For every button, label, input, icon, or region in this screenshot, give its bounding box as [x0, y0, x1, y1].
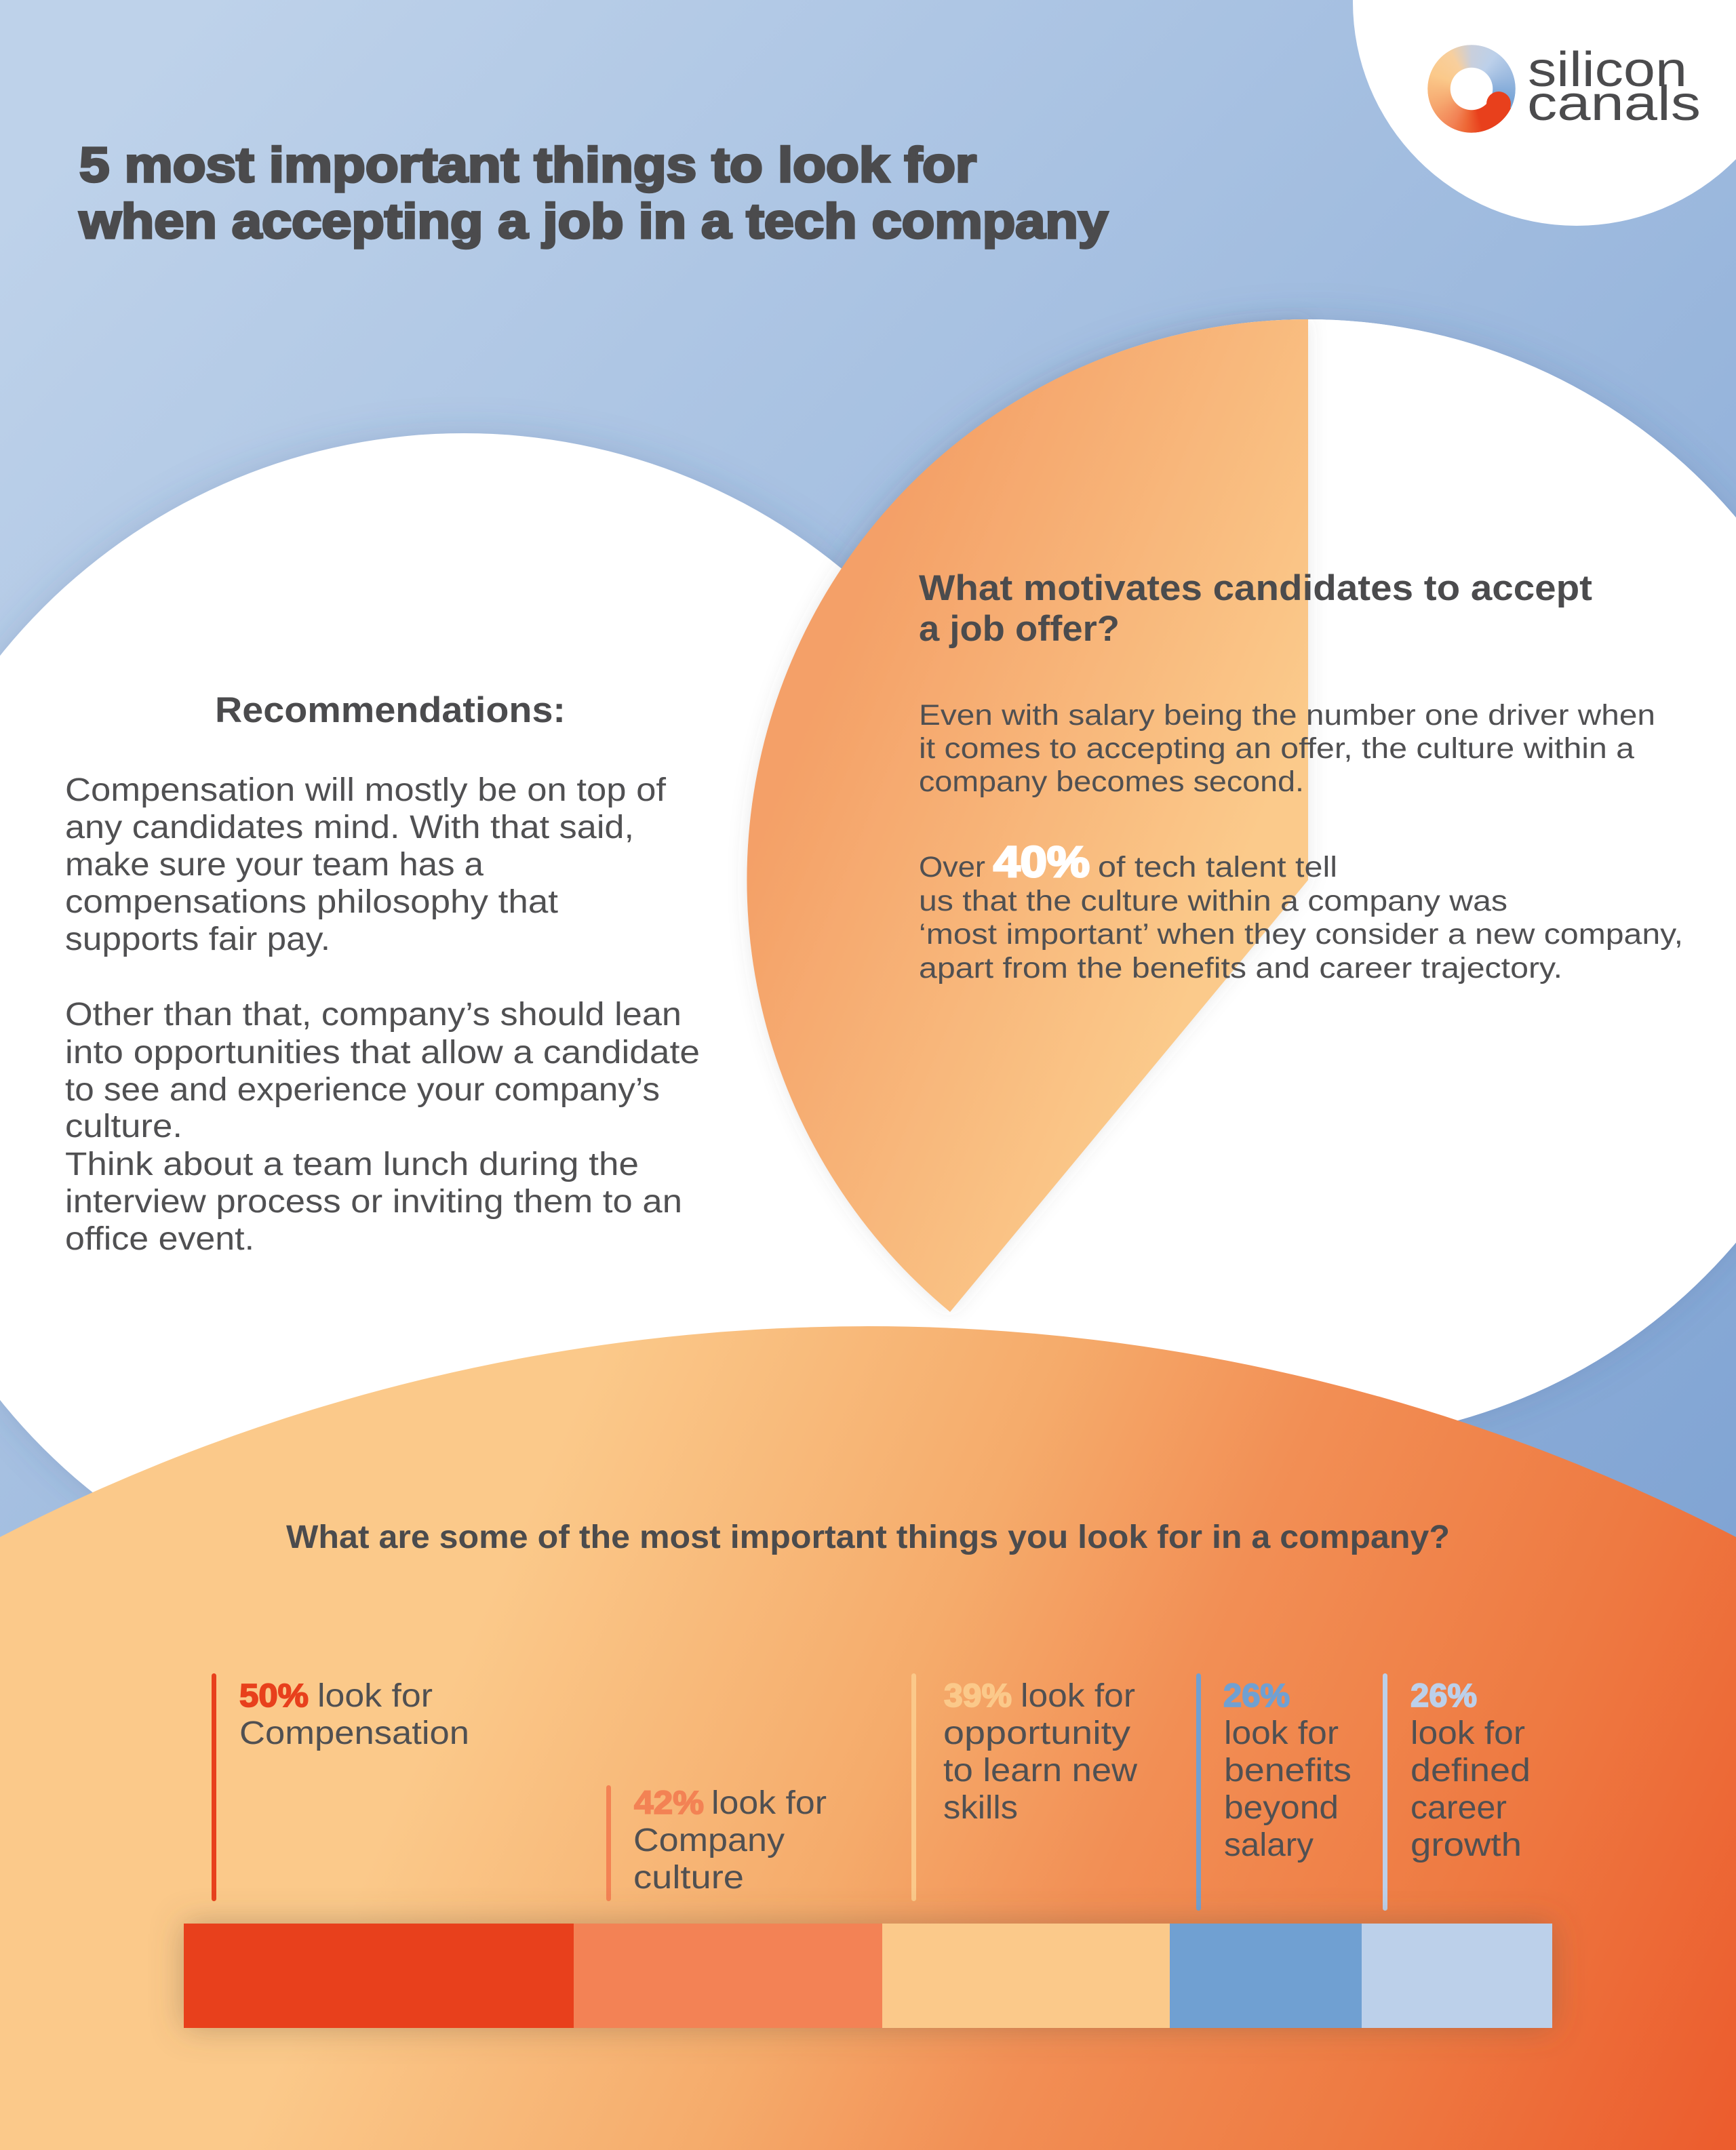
paragraph: salary driver: Even with salary being the number one driver when — [919, 699, 1655, 732]
callout: 42% company culture: culture — [633, 1860, 744, 1896]
callout: 50% compensation: look for — [317, 1678, 433, 1714]
callout: 39% learn new skills: to learn new — [943, 1753, 1137, 1789]
callout: 39% learn new skills: look for — [1021, 1678, 1135, 1714]
panel: motivation circle — [747, 319, 1736, 1441]
callout: 26% career growth: defined — [1410, 1753, 1531, 1789]
paragraph: culture: Other than that, company’s should lean — [65, 997, 682, 1033]
callout: 26% career growth — [1383, 1673, 1531, 1911]
paragraph: culture: culture. — [65, 1109, 182, 1144]
callout: 39% learn new skills: skills — [943, 1790, 1018, 1826]
callout: 26% benefits: salary — [1224, 1827, 1314, 1863]
title — [79, 138, 1108, 249]
paragraph: compensation — [65, 772, 667, 957]
icon: gradient ring — [1427, 45, 1516, 133]
callout: 39% learn new skills: opportunity — [943, 1715, 1130, 1751]
text block: what motivates candidates — [919, 568, 1683, 984]
paragraph: culture: Think about a team lunch during the — [65, 1147, 639, 1182]
paragraph: culture: into opportunities that allow a candidate — [65, 1035, 700, 1071]
paragraph: compensation: make sure your team has a — [65, 847, 484, 883]
heading: what motivates candidates: a job offer? — [919, 609, 1120, 649]
heading: recommendations: Recommendations: — [215, 690, 566, 730]
paragraph: 40 percent culture: ‘most important’ when they consider a new company, — [919, 918, 1683, 951]
callout: 26% career growth: growth — [1410, 1827, 1522, 1863]
paragraph: culture: office event. — [65, 1221, 254, 1257]
paragraph: 40 percent culture: of tech talent tell — [1098, 851, 1337, 883]
stat: 40%: 40% — [993, 837, 1090, 886]
paragraph: compensation: any candidates mind. With that said, — [65, 810, 634, 845]
callout: 26% benefits: 26% — [1223, 1678, 1290, 1714]
paragraph: 40 percent culture: Over — [919, 851, 985, 883]
title: 5 most important things to look for — [79, 138, 976, 193]
paragraph: salary driver: it comes to accepting an offer, the culture within a — [919, 732, 1634, 765]
chart: stacked bar — [184, 1924, 1552, 2028]
callout: 42% company culture — [606, 1785, 827, 1901]
callout: 39% learn new skills — [911, 1673, 1137, 1901]
panel: survey dome — [0, 1326, 1736, 2150]
panel: recommendations circle — [0, 433, 1059, 1623]
logo: silicon canals: canals — [1527, 77, 1701, 131]
callout: 42% company culture: 42% — [634, 1785, 704, 1821]
callout: 42% company culture: Company — [633, 1823, 785, 1858]
callout: 50% compensation — [212, 1673, 469, 1901]
callout: 26% career growth: look for — [1410, 1715, 1525, 1751]
paragraph: 40 percent culture: apart from the benefits and career trajectory. — [919, 952, 1562, 984]
paragraph: culture: interview process or inviting them to an — [65, 1184, 682, 1220]
heading: survey question: What are some of the most important things you look for in a company? — [286, 1519, 1450, 1555]
paragraph: culture — [65, 997, 700, 1257]
text block: recommendations — [65, 690, 700, 1257]
callout: 50% compensation: Compensation — [239, 1715, 469, 1751]
callout: 26% benefits: benefits — [1224, 1753, 1352, 1789]
logo: silicon canals — [1427, 43, 1701, 133]
paragraph: salary driver: company becomes second. — [919, 765, 1304, 798]
chart: pie wedge — [747, 319, 1308, 1312]
callout: 42% company culture: look for — [711, 1785, 827, 1821]
paragraph: compensation: Compensation will mostly be on top of — [65, 772, 667, 808]
callout: 26% benefits: beyond — [1224, 1790, 1339, 1826]
callout: 26% benefits: look for — [1224, 1715, 1339, 1751]
paragraph: compensation: supports fair pay. — [65, 921, 330, 957]
callout: 26% benefits — [1196, 1673, 1352, 1911]
callout: 39% learn new skills: 39% — [944, 1678, 1012, 1714]
logo: silicon canals: silicon — [1528, 43, 1687, 97]
title: when accepting a job in a tech company — [79, 195, 1108, 249]
panel: logo circle — [1353, 0, 1736, 226]
paragraph: compensation: compensations philosophy that — [65, 884, 558, 920]
callout: 26% career growth: career — [1410, 1790, 1507, 1826]
paragraph: 40 percent culture: us that the culture within a company was — [919, 885, 1507, 917]
heading: what motivates candidates: What motivates candidates to accept — [919, 568, 1592, 608]
paragraph: 40 percent culture — [919, 837, 1683, 984]
heading: what motivates candidates — [919, 568, 1592, 649]
callout: 50% compensation: 50% — [239, 1678, 309, 1714]
paragraph: culture: to see and experience your company’s — [65, 1072, 660, 1108]
paragraph: salary driver — [919, 699, 1655, 798]
callout: 26% career growth: 26% — [1410, 1678, 1477, 1714]
